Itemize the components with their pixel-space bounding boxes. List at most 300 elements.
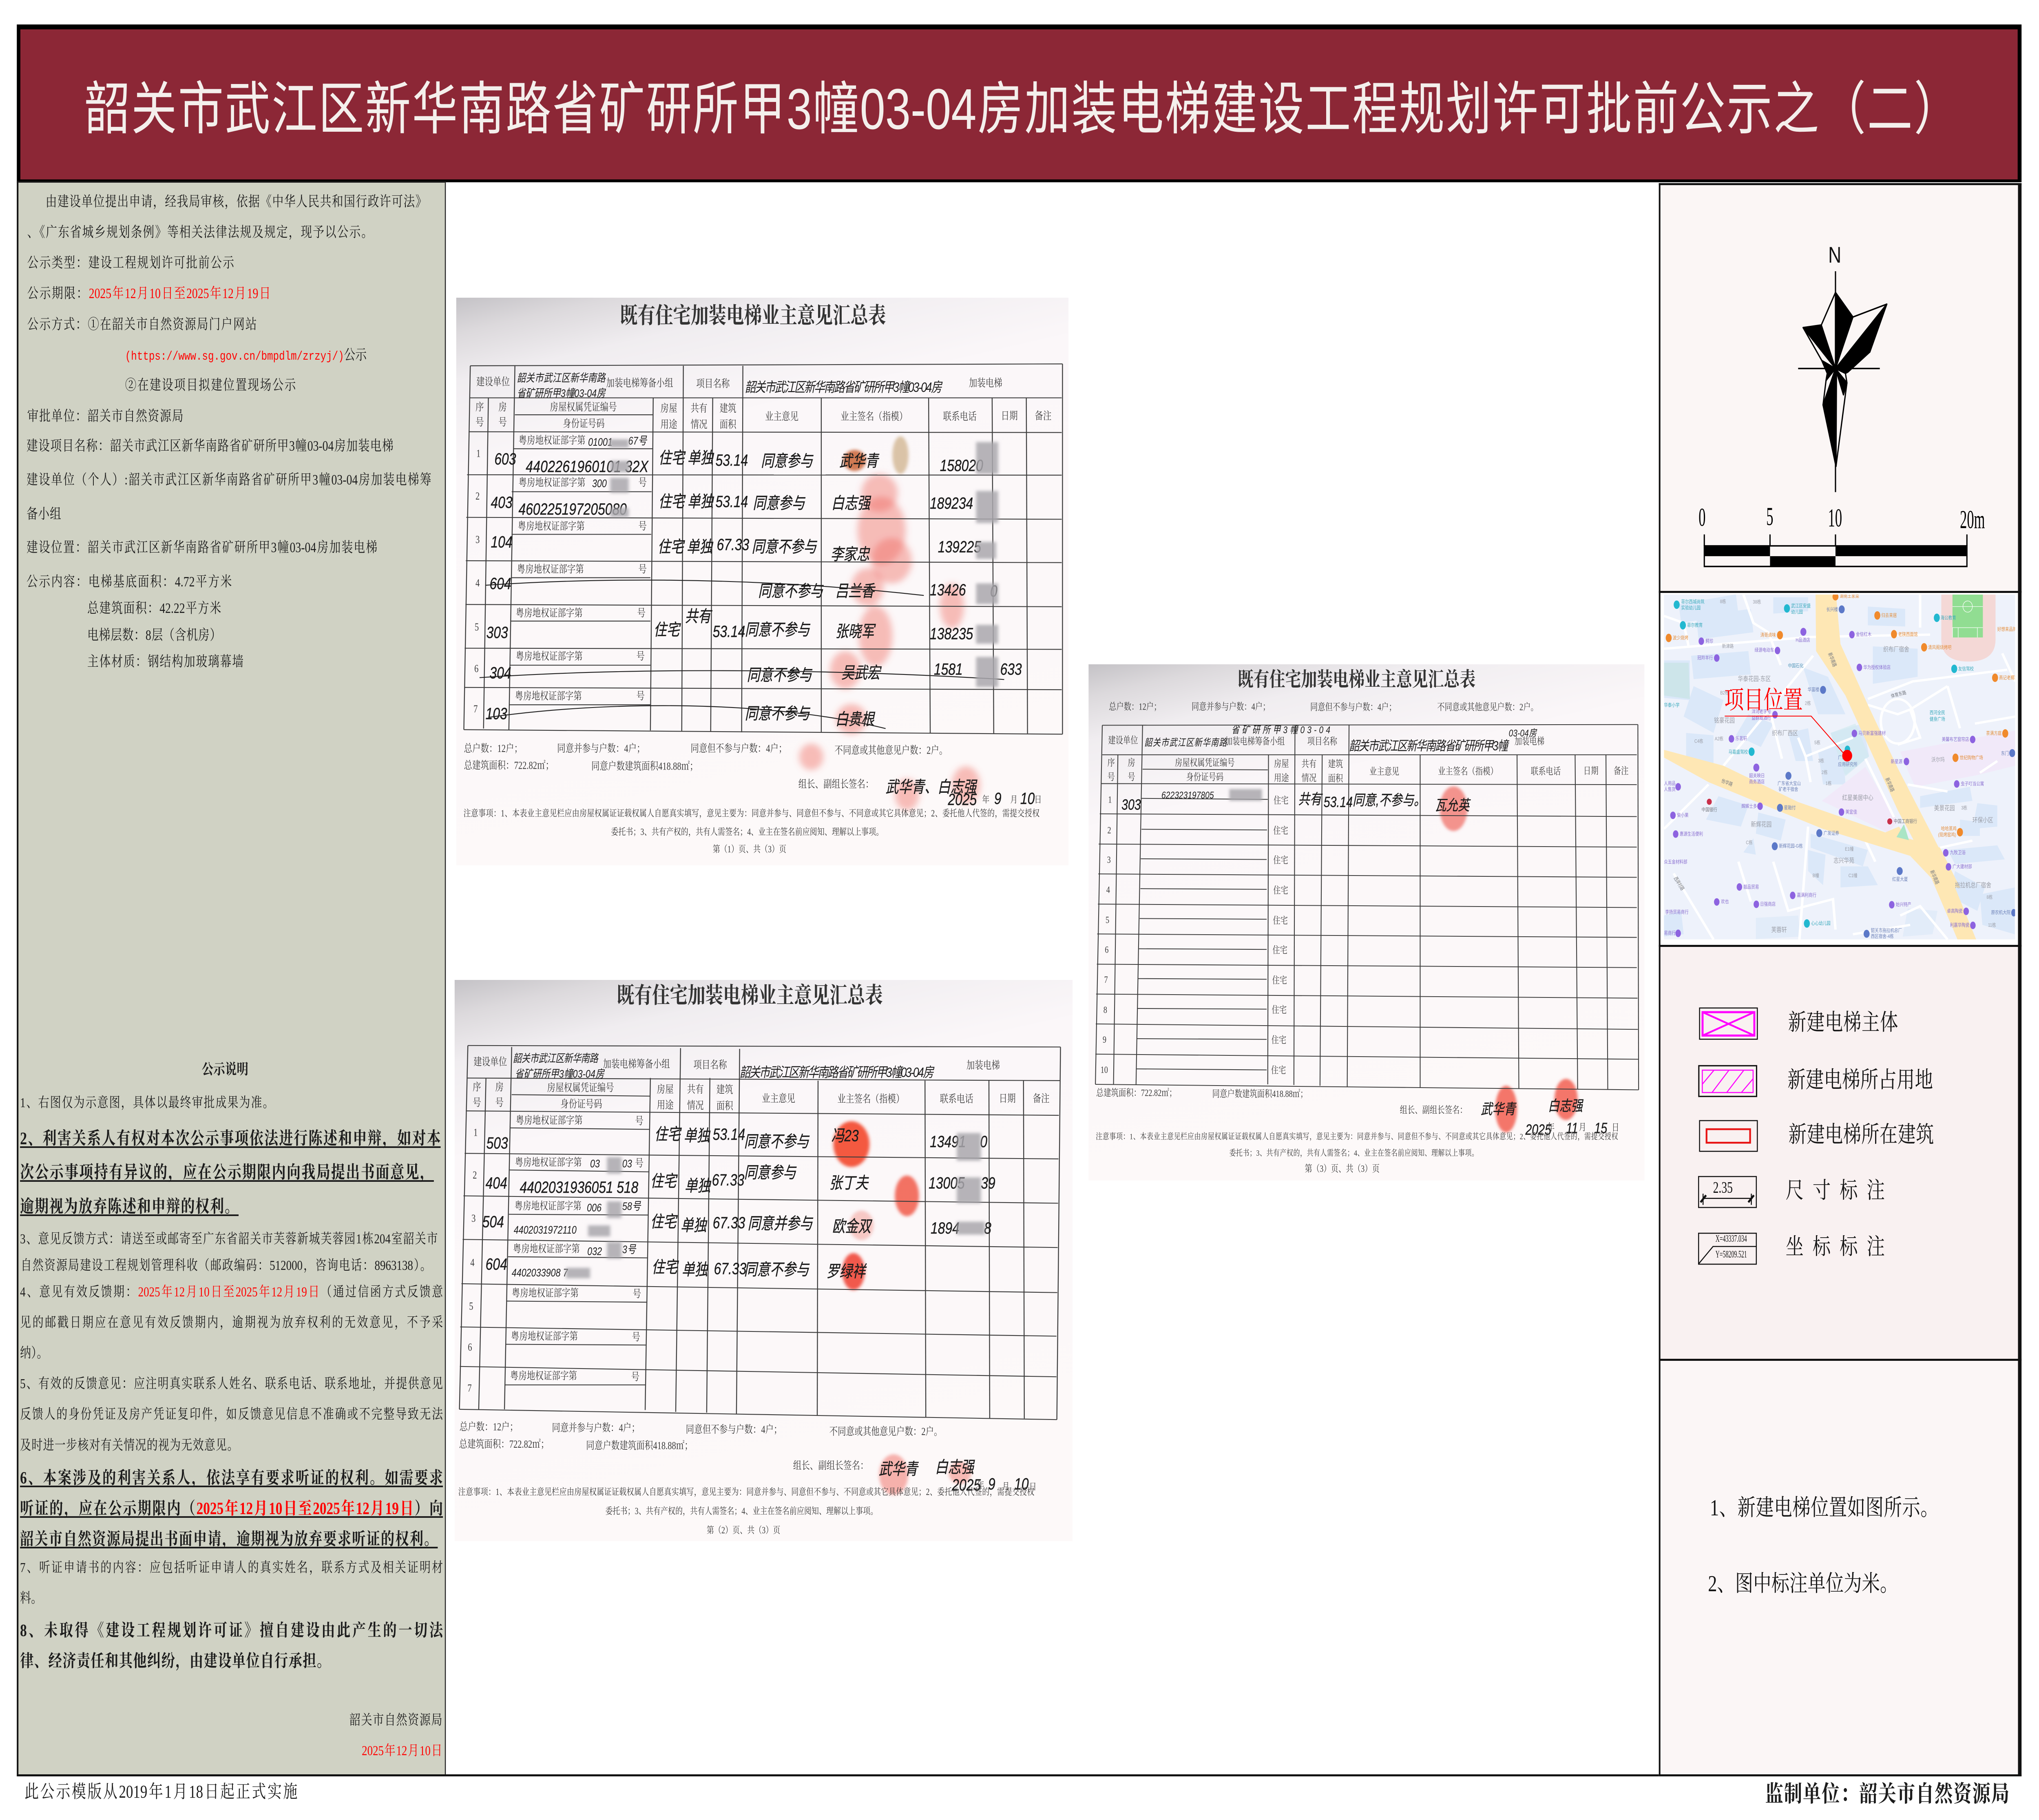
- survey form photo 1: 同意户数建筑面积418.88㎡；: [591, 760, 698, 772]
- survey form photo 1: 号: [638, 563, 647, 575]
- survey form photo 1: 加装电梯筹备小组: [606, 377, 673, 389]
- notice instructions text block: 逾期视为放弃陈述和申辩的权利。: [20, 1197, 239, 1216]
- survey form photo 1: 不同意或其他意见户数：2户。: [834, 744, 948, 756]
- location map: 铭豪花园: [1714, 717, 1735, 725]
- survey form photo 1: 吴武宏: [841, 663, 882, 682]
- survey form photo 2: 8: [984, 1218, 991, 1237]
- survey form photo 3: 不同意或其他意见户数：2户。: [1437, 701, 1538, 712]
- survey form photo 1: 633: [1000, 660, 1022, 678]
- location map: 织布厂西区: [1772, 730, 1798, 737]
- survey form photo 1: 张晓军: [835, 622, 876, 641]
- survey form photo 1: 业主意见: [765, 411, 798, 423]
- survey form photo 2: 单独: [681, 1216, 708, 1234]
- survey form photo 3: 2: [1107, 825, 1111, 836]
- survey form photo 2: 日期: [999, 1092, 1016, 1105]
- location map: 九牧卫浴: [1950, 849, 1966, 856]
- survey form photo 2: 欧金双: [832, 1217, 873, 1236]
- survey form photo 2: 单独: [684, 1126, 711, 1145]
- legend label: dimension note: 尺 寸 标 注: [1785, 1178, 1885, 1203]
- survey form photo 1: 2: [475, 491, 480, 502]
- scale bar: [1696, 504, 1987, 571]
- survey form photo 3: 日期: [1583, 765, 1599, 776]
- survey form photo 3: 房: [1128, 757, 1135, 768]
- survey form photo 1: 1: [476, 448, 480, 460]
- survey form photo 3: 加装电梯: [1515, 736, 1544, 747]
- survey form photo 3: 武华青: [1481, 1101, 1517, 1117]
- location map: 涛哥卤味: [1760, 632, 1776, 638]
- survey form photo 3: 6: [1105, 944, 1108, 955]
- survey form photo 1: 粤房地权证部字第: [516, 650, 583, 663]
- location map: 中国石化: [1788, 662, 1804, 669]
- survey form photo 2: 5: [469, 1300, 473, 1312]
- survey form photo 1: 6: [474, 663, 478, 674]
- survey form photo 2: 4402031972110: [514, 1224, 577, 1236]
- location map: 老陕西面馆: [1898, 631, 1918, 637]
- icon: host building symbol: [1700, 1121, 1757, 1151]
- icon: coordinate note symbol: X=43337.034: [1716, 1233, 1747, 1244]
- location map: 韶关市拖拉机总厂: [1871, 927, 1902, 933]
- survey form photo 2: 备注: [1033, 1092, 1050, 1105]
- location map: 清风阁烧烤吧: [1928, 644, 1951, 650]
- survey form photo 3: 共有: [1298, 791, 1323, 807]
- survey form photo 2: 号: [632, 1331, 640, 1343]
- survey form photo 3: 建设单位: [1108, 735, 1138, 746]
- survey form photo 1: 用途: [661, 418, 677, 431]
- survey form photo 1: 注意事项：1、本表业主意见栏应由房屋权属证证载权属人自愿真实填写，意见主要为：同意并参与、同意但不参与、不同意或其它具体意见；2、委托他人代签的，需提交授权: [463, 808, 1040, 819]
- survey form photo 1: 住宅: [659, 449, 686, 467]
- location map: 实验幼儿园: [1681, 604, 1701, 611]
- survey form photo 3: 住宅: [1273, 915, 1288, 926]
- survey form photo 2: 日: [1029, 1482, 1037, 1492]
- survey form photo 2: 韶关市武江区新华南路省矿研所甲3幢03-04房: [740, 1065, 935, 1080]
- notice basics text block: [17, 181, 446, 671]
- location map: 38栋: [1753, 599, 1761, 605]
- scale bar: 20m: [1960, 505, 1985, 534]
- survey form photo 1: 号: [638, 477, 647, 489]
- survey form photo 3: 住宅: [1272, 1004, 1287, 1015]
- panel: north arrow and scale: [1659, 183, 2021, 592]
- location map: 韶关映日: [1749, 772, 1765, 778]
- survey form photo 1: 103: [486, 704, 507, 723]
- location map: 华泰花园-东区: [1738, 675, 1771, 683]
- location map: A2栋: [1715, 736, 1723, 742]
- survey form photo 3: 日: [1612, 1122, 1619, 1133]
- survey form photo 3: 加装电梯筹备小组: [1225, 736, 1285, 747]
- survey form photo 3: 10: [1101, 1064, 1108, 1075]
- survey form photo 1: 5: [475, 621, 479, 633]
- scale bar: 0: [1698, 504, 1705, 532]
- survey form photo 3: 省矿研所甲3幢03-04: [1232, 724, 1330, 735]
- survey form photo 1: 号: [636, 690, 645, 702]
- survey form photo 3: 用途: [1274, 773, 1289, 783]
- location map: 冠羚羊行: [1697, 655, 1713, 661]
- location map: 8栋: [1986, 894, 1993, 900]
- survey form photo 1: 身份证号码: [563, 418, 605, 430]
- survey form photo 3: 同意,不参与。: [1353, 792, 1425, 808]
- survey form photo 2: 006: [587, 1202, 602, 1214]
- survey form photo 1: 情况: [690, 418, 708, 431]
- location map: 广东省: [1838, 755, 1850, 761]
- location map: 原农机大院: [1991, 909, 2010, 916]
- survey form photo 1: 0: [990, 582, 997, 600]
- survey form photo 2: 13005: [929, 1174, 965, 1192]
- survey form photo 1: 7: [473, 703, 478, 715]
- survey form photo 2: 53.14: [713, 1125, 745, 1143]
- location map: 美馨布艺窗帘店: [1942, 736, 1969, 742]
- location map: 环保小区: [1973, 816, 1993, 824]
- survey form photo 2: 2025: [951, 1476, 981, 1494]
- location map: 惠源生活便利: [1680, 831, 1703, 837]
- survey form photo 1: 住宅: [659, 492, 686, 511]
- location map: 幼儿园: [1791, 609, 1803, 615]
- panel: public notice text: [17, 181, 446, 1776]
- survey form photo 1: 9: [994, 789, 1002, 807]
- location map: 始兴特产: [1896, 901, 1911, 907]
- notice basics text block: 、《广东省城乡规划条例》等相关法律法规及规定，现予以公示。: [27, 224, 373, 240]
- survey form photo 3: 韶关市武江区新华南路省矿研所甲3幢: [1349, 739, 1510, 754]
- survey form photo 3: 韶关市武江区新华南路: [1144, 737, 1227, 748]
- survey form photo 1: 13426: [930, 581, 966, 599]
- survey form photo 2: 032: [587, 1245, 602, 1258]
- survey form photo 2: 加装电梯筹备小组: [603, 1058, 670, 1070]
- survey form photo 2: 504: [482, 1212, 504, 1231]
- notice basics text block: 总建筑面积：42.22平方米: [87, 600, 221, 616]
- icon: elevator land symbol: [1699, 1066, 1756, 1097]
- survey form photo 2: 号: [473, 1097, 481, 1109]
- survey form photo 3: 住宅: [1273, 825, 1288, 836]
- notice basics text block: 审批单位：韶关市自然资源局: [27, 408, 184, 424]
- legend label: coordinate note: 坐 标 标 注: [1785, 1234, 1885, 1260]
- survey form photo 3: 年: [1547, 1122, 1555, 1132]
- survey form photo 1: 白志强: [832, 494, 871, 512]
- location map: 中国工商银行: [1894, 818, 1917, 824]
- notice basics text block: 公示内容：电梯基底面积：4.72平方米: [27, 574, 232, 590]
- survey form photo 1: 第（1）页、共（3）页: [713, 844, 786, 854]
- note 2: 2、图中标注单位为米。: [1708, 1571, 1898, 1597]
- survey form photo 2: 加装电梯: [966, 1059, 1000, 1072]
- survey form photo 2: 住宅: [652, 1258, 679, 1276]
- location map: 益群烟酒行: [1752, 714, 1771, 721]
- survey form photo 2: 3: [471, 1213, 475, 1224]
- location map: B幢: [1813, 872, 1819, 878]
- notice instructions text block: 听证的，应在公示期限内（2025年12月10日至2025年12月19日）向: [20, 1499, 443, 1518]
- survey form photo 1: 同意不参与: [745, 704, 811, 723]
- location map: 红星美居中心: [1842, 794, 1873, 802]
- location map: 怡华路: [1721, 778, 1734, 787]
- survey form photo 2: 号: [631, 1371, 639, 1383]
- location map: 华富楼: [1808, 686, 1819, 693]
- survey form photo 3: 5: [1106, 914, 1109, 925]
- survey form photo 2: 03: [590, 1158, 600, 1170]
- location map: 新津路: [1722, 643, 1734, 649]
- survey form photo 2: 号: [495, 1097, 504, 1109]
- survey form photo 3: 组长、副组长签名：: [1400, 1105, 1467, 1115]
- survey form photo 1: 10: [1020, 789, 1035, 807]
- survey form photo 2: 粤房地权证部字第: [512, 1287, 579, 1299]
- location map: 星融付: [1784, 805, 1796, 811]
- survey form photo 1: 月: [1010, 795, 1017, 805]
- survey form photo 2: 同意并参与: [747, 1214, 814, 1233]
- survey form photo 2: 韶关市武江区新华南路: [513, 1053, 599, 1065]
- survey form photo 1: 同意参与: [753, 494, 806, 512]
- location map: 新华南路: [1827, 652, 1838, 668]
- survey form photo 3: 住宅: [1272, 1035, 1286, 1046]
- survey form photo 2: 粤房地权证部字第: [516, 1115, 583, 1126]
- location map: 柴小果: [1677, 812, 1689, 818]
- survey form photo 3: 项目名称: [1307, 736, 1338, 747]
- notice instructions text block: 2025年12月10日: [362, 1743, 442, 1758]
- survey form photo 2: 粤房地权证部字第: [511, 1330, 578, 1342]
- survey form photo 1: 号: [636, 650, 645, 663]
- notice instructions text block: 7、听证申请书的内容：应包括听证申请人的真实姓名，联系方式及相关证明材: [20, 1560, 443, 1575]
- survey form photo 3: 住宅: [1271, 1065, 1286, 1076]
- location map: 11栋: [1988, 922, 1996, 928]
- survey form photo 1: 同意不参与: [752, 537, 818, 556]
- survey form photo 1: 李家忠: [831, 545, 870, 564]
- survey form photo 2: 粤房地权证部字第: [513, 1243, 580, 1255]
- title banner: [17, 24, 2021, 182]
- survey form photo 2: 张丁夫: [829, 1174, 869, 1192]
- survey form photo 2: 月: [1002, 1482, 1010, 1492]
- survey form photo 3: 白志强: [1548, 1098, 1583, 1114]
- survey form photo 2: 住宅: [650, 1212, 678, 1231]
- survey form photo 2: 10: [1014, 1475, 1029, 1493]
- survey form photo 2: 2: [473, 1170, 477, 1181]
- icon: dimension note symbol: [1698, 1176, 1756, 1207]
- survey form photo 3: 住宅: [1273, 855, 1288, 865]
- survey form photo 1: 白贵根: [835, 710, 875, 728]
- location map: 2栋: [1822, 769, 1828, 775]
- survey form photo 1: 联系电话: [943, 411, 977, 423]
- survey form photo 2: 粤房地权证部字第: [515, 1200, 582, 1212]
- notice basics text block: 公示期限：2025年12月10日至2025年12月19日: [27, 285, 271, 301]
- survey form photo 1: 4: [475, 577, 480, 589]
- survey form photo 1: 303: [487, 623, 508, 641]
- survey form photo 3: 注意事项：1、本表业主意见栏应由房屋权属证证载权属人自愿真实填写，意见主要为：同意并参与、同意但不参与、不同意或其它具体意见；2、委托他人代签的，需提交授权: [1096, 1132, 1618, 1141]
- survey form photo 3: 面积: [1328, 773, 1343, 784]
- north label: N: [1828, 242, 1841, 268]
- survey form photo 2: 既有住宅加装电梯业主意见汇总表: [617, 983, 883, 1008]
- survey form photo 2: 房屋: [657, 1083, 674, 1095]
- survey form photo 1: 01001: [588, 436, 613, 449]
- footer: supervising unit: 监制单位：韶关市自然资源局: [1765, 1782, 2009, 1807]
- survey form photo 1: 省矿研所甲3幢03-04房: [517, 387, 606, 400]
- survey form photo 2: 03: [622, 1158, 632, 1170]
- survey form photo 1: 单独: [688, 449, 714, 467]
- location map: 华泰小学: [1664, 702, 1680, 708]
- survey form photo 3: 建筑: [1328, 759, 1343, 770]
- survey form photo 1: 单独: [688, 492, 714, 511]
- survey form photo 1: 粤房地权证部字第: [518, 520, 585, 533]
- survey form photo 2: 4: [470, 1257, 475, 1269]
- location map: E1幢: [1845, 846, 1853, 852]
- survey form photo 3: 情况: [1302, 773, 1316, 783]
- survey form photo 3: 303: [1121, 796, 1141, 813]
- survey form photo 3: 备注: [1614, 765, 1629, 776]
- survey form photo 2: 房: [495, 1081, 504, 1093]
- title text: 韶关市武江区新华南路省矿研所甲3幢03-04房加装电梯建设工程规划许可批前公示之（二）: [84, 77, 1959, 141]
- survey form photo 1: 304: [490, 663, 511, 682]
- location map: 茶满方庭: [1986, 730, 2002, 736]
- location map: 美景花园: [1934, 804, 1955, 812]
- notice instructions text block: 4、意见有效反馈期：2025年12月10日至2025年12月19日（通过信函方式反馈意: [20, 1285, 443, 1300]
- survey form photo 1: 武华青: [839, 451, 880, 470]
- survey form photo 3: 总户数：12户；: [1109, 701, 1161, 712]
- survey form photo 1: 粤房地权证部字第: [516, 607, 583, 619]
- survey form photo 3: 住宅: [1274, 795, 1289, 806]
- survey form photo 2: 总建筑面积：722.82㎡；: [459, 1438, 549, 1451]
- survey form photo 3: 3: [1107, 854, 1111, 865]
- location map: 华为授权体验店: [1863, 664, 1891, 670]
- location map: 1栋: [1826, 780, 1831, 786]
- location map: 健身广场: [1930, 716, 1945, 722]
- survey form photo 2: 1: [473, 1127, 478, 1139]
- survey form photo 3: 业主意见: [1369, 766, 1399, 777]
- survey form photo 3: 8: [1104, 1004, 1107, 1015]
- survey form photo 3: 住宅: [1273, 885, 1288, 896]
- panel: legend: [1659, 945, 2021, 1361]
- notice basics text block: 电梯层数：8层（含机房）: [87, 627, 221, 643]
- survey form photo 1: 建筑: [719, 402, 736, 414]
- survey form photo 1: 韶关市武江区新华南路: [517, 372, 606, 384]
- location map: 广发证券: [1824, 830, 1839, 836]
- survey form photo 2: 省矿研所甲3幢03-04房: [515, 1068, 605, 1080]
- survey form photo 1: 300: [592, 478, 607, 490]
- survey form photo 2: 单独: [682, 1261, 709, 1279]
- location map: 日强商店: [1760, 901, 1776, 907]
- note 1: 1、新建电梯位置如图所示。: [1710, 1495, 1939, 1521]
- survey form photo 2: 组长、副组长签名：: [793, 1460, 869, 1472]
- location map: 众五金材料部: [1664, 858, 1687, 865]
- legend label: elevator body: 新建电梯主体: [1788, 1010, 1898, 1035]
- notice instructions text block: 5、有效的反馈意见：应注明真实联系人姓名、联系电话、联系地址，并提供意见: [20, 1376, 443, 1391]
- location map: 5栋: [1814, 739, 1820, 745]
- survey form photo 1: 住宅: [658, 537, 685, 556]
- survey form photo 1: 加装电梯: [969, 377, 1002, 389]
- survey form photo 1: 既有住宅加装电梯业主意见汇总表: [620, 303, 886, 328]
- survey form photo 2: 4402031936051 518: [520, 1178, 638, 1196]
- survey form photo 1: 同意不参与: [758, 582, 824, 600]
- location map: 利嘉华陶瓷: [1950, 922, 1970, 928]
- icon: wind rose compass: [1796, 269, 1890, 494]
- survey form photo 2: 6: [468, 1342, 472, 1353]
- survey form photo 2: 注意事项：1、本表业主意见栏应由房屋权属证证载权属人自愿真实填写，意见主要为：同意并参与、同意但不参与、不同意或其它具体意见；2、委托他人代签的，需提交授权: [458, 1486, 1035, 1497]
- notice instructions text block: 反馈人的身份凭证及房产凭证复印件，如反馈意见信息不准确或不完整导致无法: [20, 1407, 443, 1422]
- notice basics text block: 备小组: [27, 506, 61, 522]
- location map: 辉辉士多: [1741, 803, 1757, 809]
- location map: 红星大厦: [1892, 876, 1908, 882]
- location map: 卓高陶瓷: [1947, 908, 1963, 914]
- survey form photo 2: 面积: [717, 1100, 733, 1112]
- survey form photo 3: 11: [1566, 1120, 1578, 1136]
- survey form photo 1: 4402261960101 32X: [526, 457, 649, 476]
- survey form photo 3: 03-04房: [1509, 728, 1537, 739]
- survey form photo 1: 建设单位: [476, 376, 510, 388]
- location map: 中国银行: [1702, 806, 1717, 813]
- legend symbols: [1697, 1005, 1760, 1268]
- location map: 长兴楼: [1826, 606, 1838, 613]
- location map: 8栋: [1720, 598, 1726, 604]
- survey form photo 3: 联系电话: [1531, 766, 1561, 776]
- survey form photo 1: 共有: [685, 607, 713, 626]
- location map: B2栋: [1720, 690, 1729, 696]
- notice basics text block: (https://www.sg.gov.cn/bmpdlm/zrzyj/)公示: [125, 347, 367, 364]
- location map: 3栋: [1818, 757, 1824, 764]
- location map: 武江区安盛: [1791, 603, 1811, 609]
- location map: 新辉花园: [1751, 821, 1771, 828]
- survey form photo 3: 共有: [1302, 759, 1316, 770]
- notice instructions text block: 自然资源局建设工程规划管理科收（邮政编码：512000，咨询电话：8963138）。: [21, 1258, 431, 1273]
- survey form photo 1: 备注: [1035, 410, 1051, 422]
- location map: 易商行: [1664, 930, 1676, 936]
- survey form photo 3: 同意并参与户数：4户；: [1192, 701, 1270, 712]
- survey form photo 2: 第（2）页、共（3）页: [707, 1525, 780, 1536]
- survey form photo 2: 39: [981, 1174, 995, 1192]
- survey form photo 2: 67.33: [713, 1214, 745, 1232]
- survey form photo 2: 号: [635, 1157, 644, 1170]
- survey form photo 1: 粤房地权证部字第: [515, 690, 582, 702]
- notice instructions text block: 公示说明: [202, 1061, 248, 1077]
- location map: 洋河老字号: [1752, 708, 1771, 714]
- survey form photo 2: 同意参与: [744, 1163, 797, 1182]
- survey form photo 3: 序: [1107, 757, 1115, 768]
- location map: [1664, 595, 2015, 940]
- survey form photo 3: 7: [1104, 974, 1108, 985]
- notice instructions text block: 韶关市自然资源局提出书面申请，逾期视为放弃要求听证的权利。: [20, 1530, 438, 1549]
- location map: 欢也: [1721, 898, 1729, 905]
- survey form photo 2: 1894: [931, 1218, 960, 1237]
- survey form photo 2: 3号: [622, 1244, 637, 1256]
- location map: 菲尔西城尚筑: [1681, 598, 1705, 605]
- survey form photo 3: 房屋权属凭证编号: [1175, 757, 1235, 768]
- survey form photo 2: 同意不参与: [744, 1132, 810, 1151]
- notice basics text block: 由建设单位提出申请，经我局审核，依据《中华人民共和国行政许可法》: [46, 194, 427, 210]
- bottom frame line: [17, 1774, 2021, 1776]
- survey form photo 3: [1088, 664, 1645, 1181]
- notice basics text block: 建设位置：韶关市武江区新华南路省矿研所甲3幢03-04房加装电梯: [27, 540, 377, 555]
- survey form photo 1: 67号: [628, 435, 647, 447]
- location map: 鳄珍: [1705, 638, 1714, 644]
- survey form photo 2: 号: [635, 1115, 644, 1127]
- location map: 新星源: [1891, 758, 1902, 765]
- legend label: elevator land: 新建电梯所占用地: [1787, 1068, 1933, 1093]
- survey form photo 1: 粤房地权证部字第: [519, 434, 586, 447]
- survey form photo 2: 项目名称: [693, 1059, 727, 1071]
- survey form photo 2: 年: [977, 1480, 984, 1490]
- icon: coordinate note symbol: [1698, 1233, 1756, 1264]
- survey form photo 1: 业主签名（指模）: [840, 411, 907, 423]
- survey form photo 3: 身份证号码: [1186, 772, 1223, 783]
- survey form photo 1: 总建筑面积：722.82㎡；: [464, 759, 554, 772]
- location map: 嘉满利商行: [1797, 892, 1816, 898]
- survey form photo 2: 503: [487, 1134, 508, 1152]
- notice basics text block: 主体材质：钢结构加玻璃幕墙: [87, 654, 243, 670]
- notice basics text block: 公示方式：①在韶关市自然资源局门户网站: [27, 316, 257, 332]
- survey form photo 2: 0: [980, 1132, 987, 1151]
- survey form photo 1: 项目名称: [696, 378, 730, 390]
- survey form photo 2: 业主签名（指模）: [837, 1093, 905, 1105]
- location map: 项目位置: [1724, 686, 1803, 714]
- location map: 新辉花园-G栋: [1779, 843, 1803, 849]
- survey form photo 2: 同意并参与户数：4户；: [552, 1422, 640, 1434]
- survey form photo 3: 4: [1106, 884, 1110, 895]
- survey form photo 1: 同意不参与: [745, 621, 811, 639]
- location map: 人用品: [1664, 781, 1676, 786]
- icon: dimension note symbol: 2.35: [1713, 1179, 1733, 1196]
- notice instructions text block: 1、右图仅为示意图，具体以最终审批成果为准。: [20, 1095, 274, 1110]
- survey form photo 1: 面积: [719, 418, 736, 431]
- location map: 东门: [2001, 750, 2009, 756]
